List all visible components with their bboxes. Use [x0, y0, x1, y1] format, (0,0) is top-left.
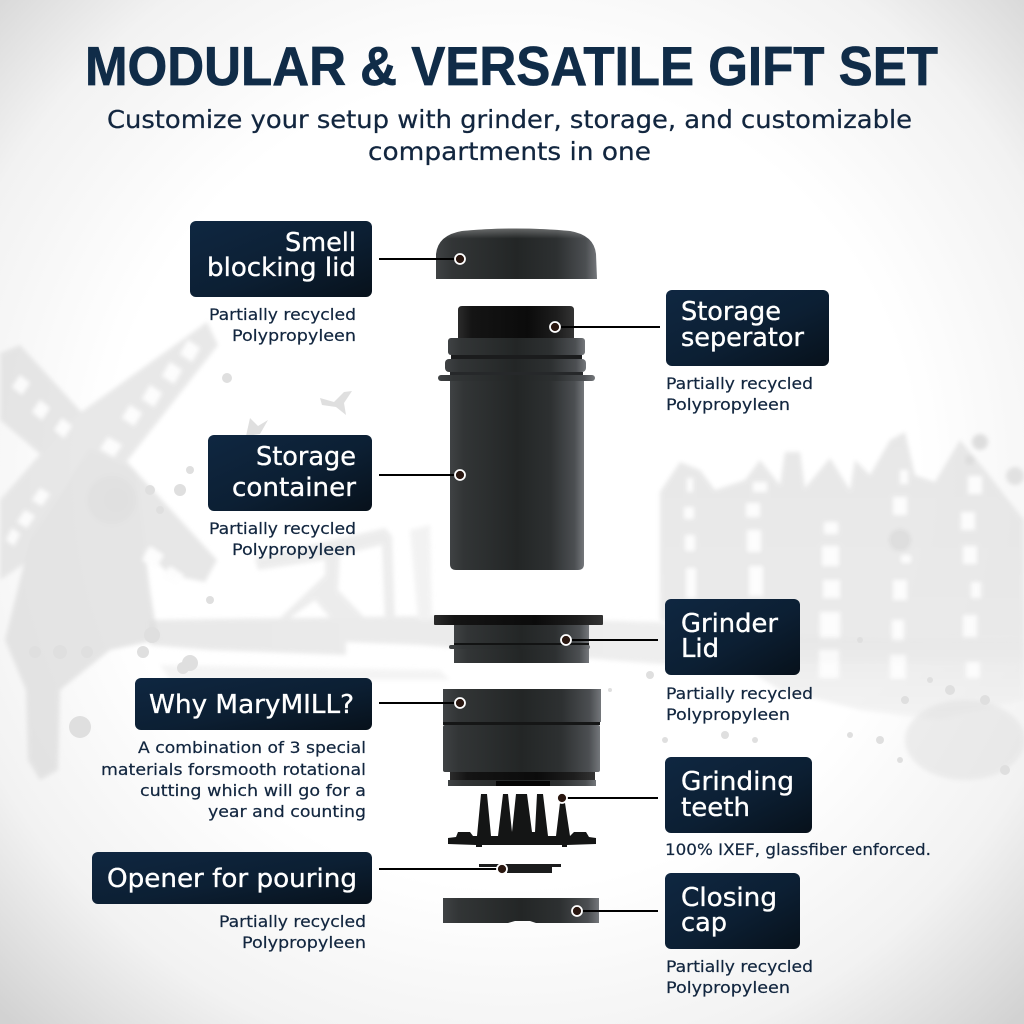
- callout: opener for pouring: Polypropyleen: [242, 933, 366, 952]
- callout: smell blocking lid: Smell: [285, 228, 356, 258]
- connector lines and dots: [379, 254, 660, 916]
- callout: grinder lid: Lid: [681, 634, 719, 664]
- callout: storage separator: seperator: [681, 323, 805, 353]
- callout: grinder lid: Partially recycled: [666, 684, 813, 703]
- callout: storage separator: Storage: [681, 297, 781, 327]
- subtitle: compartments in one: [368, 137, 651, 166]
- callout: closing cap: Closing: [681, 883, 777, 913]
- callout: storage container: [208, 435, 372, 559]
- product: grinding teeth: [448, 794, 596, 847]
- callout: opener for pouring: Opener for pouring: [107, 864, 357, 894]
- callout: storage container: Polypropyleen: [232, 540, 356, 559]
- callout: storage container: Storage: [256, 442, 356, 472]
- callout: opener for pouring: [92, 852, 372, 952]
- callout: storage separator: Partially recycled: [666, 374, 813, 393]
- callout: closing cap: cap: [681, 908, 727, 938]
- subtitle: Customize your setup with grinder, storage, and customizable: [107, 105, 912, 134]
- callout: grinder lid: Polypropyleen: [666, 705, 790, 724]
- callout: grinder lid: [665, 599, 813, 724]
- watercolor: canal and bridge: [150, 525, 1024, 680]
- callout: why MaryMILL: A combination of 3 special: [138, 738, 366, 757]
- product: grinder lid: [434, 615, 603, 663]
- watercolor: splatter: [29, 373, 1024, 780]
- product: smell blocking lid: [436, 228, 597, 279]
- callout: storage container: container: [232, 473, 357, 503]
- callout: storage separator: [666, 290, 829, 414]
- callout: why MaryMILL: materials forsmooth rotational: [101, 760, 366, 779]
- callout: grinding teeth: teeth: [681, 793, 750, 823]
- callout: grinding teeth: Grinding: [681, 767, 794, 797]
- product: grinder body: [443, 689, 601, 786]
- callout: storage separator: Polypropyleen: [666, 395, 790, 414]
- callout: grinder lid: Grinder: [681, 609, 779, 639]
- callout: why MaryMILL: [101, 678, 372, 821]
- product: opener: [479, 864, 561, 873]
- callout: closing cap: Polypropyleen: [666, 978, 790, 997]
- callout: storage container: Partially recycled: [209, 519, 356, 538]
- product: storage container: [438, 338, 595, 570]
- callout: closing cap: Partially recycled: [666, 957, 813, 976]
- callout: why MaryMILL: year and counting: [208, 802, 366, 821]
- callout: smell blocking lid: [190, 221, 372, 345]
- callout: grinding teeth: [665, 757, 931, 859]
- callout: why MaryMILL: Why MaryMILL?: [149, 690, 354, 720]
- title: MODULAR & VERSATILE GIFT SET: [85, 35, 938, 97]
- callout: smell blocking lid: blocking lid: [207, 253, 356, 283]
- callout: smell blocking lid: Polypropyleen: [232, 326, 356, 345]
- callout: grinding teeth: 100% IXEF, glassfiber enforced.: [665, 840, 931, 859]
- callout: why MaryMILL: cutting which will go for a: [140, 781, 366, 800]
- callout: opener for pouring: Partially recycled: [219, 912, 366, 931]
- watercolor: canal houses: [660, 432, 1024, 720]
- watercolor: windmill: [0, 322, 218, 780]
- subtitle: [107, 105, 912, 166]
- callout: closing cap: [665, 873, 813, 997]
- product: storage separator: [458, 306, 574, 338]
- product: closing cap: [443, 898, 599, 923]
- callout: smell blocking lid: Partially recycled: [209, 305, 356, 324]
